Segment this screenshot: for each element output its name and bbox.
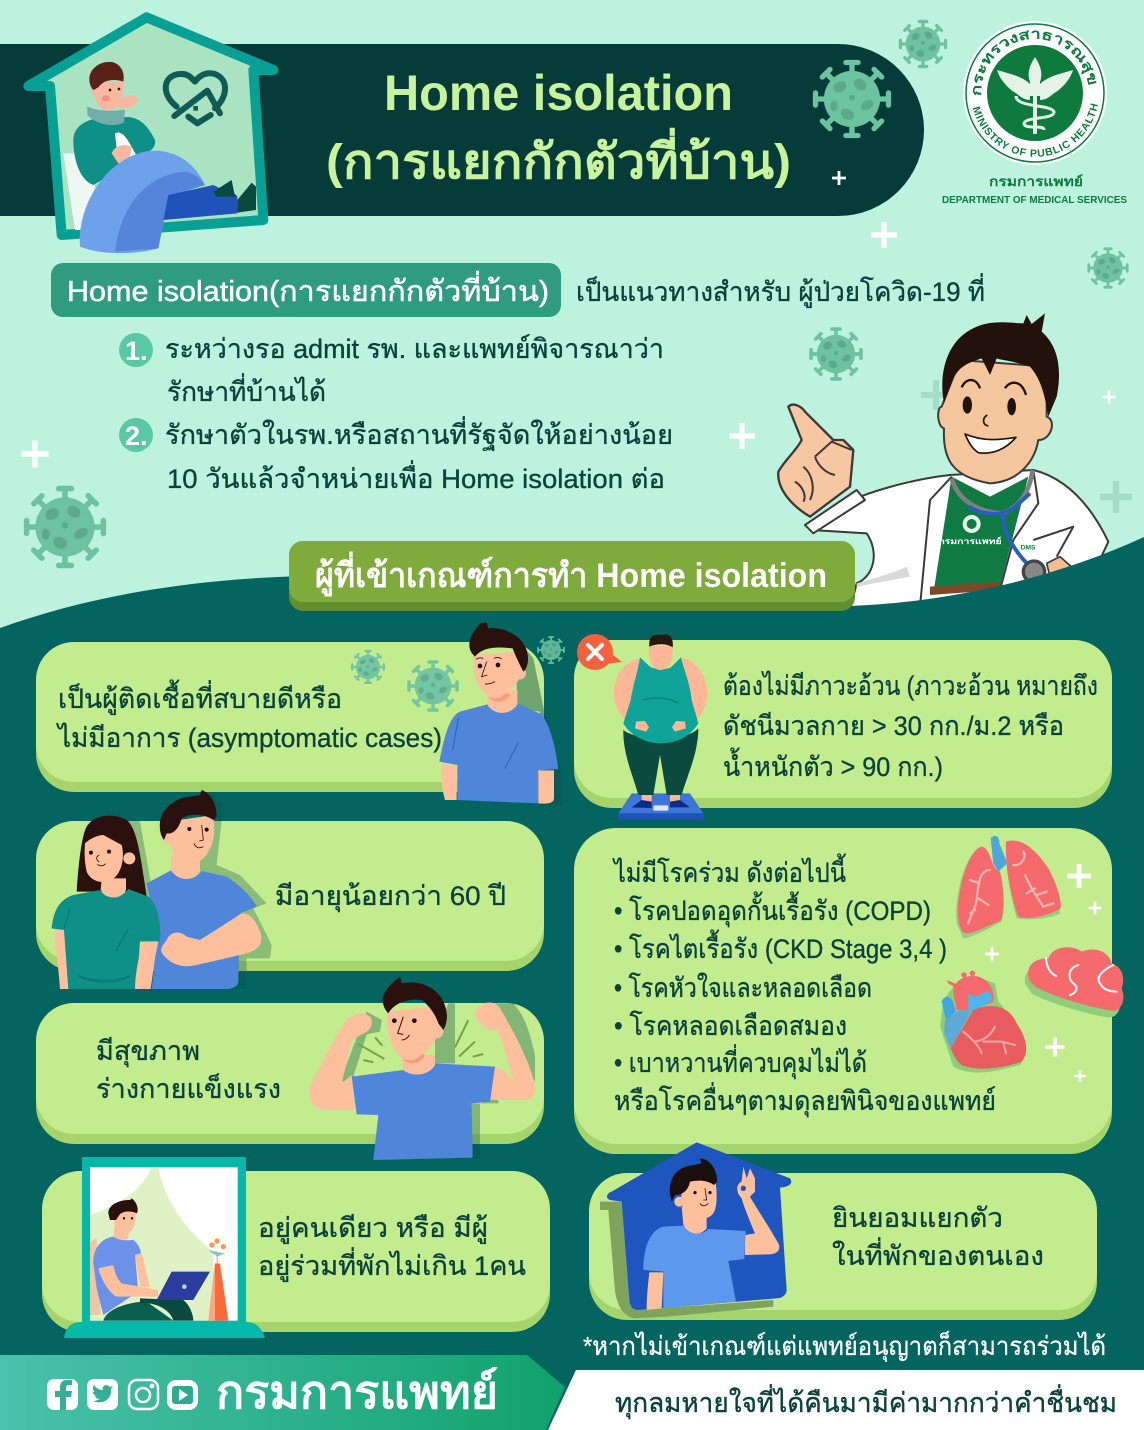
decor: viruses and plus marks: [22, 21, 1132, 565]
title: [326, 65, 791, 189]
criteria heading: ผู้ที่เข้าเกณฑ์การทำ Home isolation: [315, 551, 827, 597]
panel: living alone: อยู่ร่วมที่พักไม่เกิน 1คน: [258, 1247, 526, 1282]
panel: no obesity: น้ำหนักตัว > 90 กก.): [723, 747, 943, 782]
panel: consent to isolate: ยินยอมแยกตัว: [832, 1203, 1003, 1233]
figure: smiling man: [439, 622, 562, 805]
panel: living alone: [42, 1157, 550, 1338]
panel: comorbidities: • โรคไตเรื้อรัง (CKD Stage 3,4 ): [614, 929, 947, 964]
criteria heading: [289, 541, 855, 611]
icon: twitter: [87, 1379, 118, 1410]
figure: man on scale: [614, 634, 707, 820]
icon: house with sick man: [28, 17, 273, 253]
panel: asymptomatic: เป็นผู้ติดเชื้อที่สบายดีหรือ: [58, 679, 342, 715]
icon: heart: [940, 971, 1026, 1073]
note: *หากไม่เข้าเกณฑ์แต่แพทย์อนุญาตก็สามารถร่วมได้: [583, 1330, 1106, 1362]
panel: comorbidities: • โรคหัวใจและหลอดเลือด: [614, 972, 872, 1003]
item 2: รักษาตัวในรพ.หรือสถานที่รัฐจัดให้อย่างน้อย: [165, 416, 673, 451]
item 1: [119, 333, 664, 407]
item 1: รักษาที่บ้านได้: [167, 373, 326, 407]
logo: ministry of public health: [942, 21, 1127, 206]
panel: comorbidities: • โรคปอดอุดกั้นเรื้อรัง (COPD): [614, 891, 931, 928]
panel: comorbidities: • เบาหวานที่ควบคุมไม่ได้: [614, 1044, 867, 1080]
panel: strong health: มีสุขภาพ: [96, 1036, 200, 1068]
panel: comorbidities: [574, 828, 1123, 1154]
title: (การแยกกักตัวที่บ้าน): [326, 127, 791, 189]
doctor character: กรมการแพทย์: [938, 536, 1002, 546]
icon: youtube: [167, 1380, 198, 1410]
item 2: [119, 416, 673, 494]
panel: no obesity: ดัชนีมวลกาย > 30 กก./ม.2 หรือ: [723, 711, 1064, 741]
panel: living alone: อยู่คนเดียว หรือ มีผู้: [258, 1213, 488, 1244]
panel: strong health: [36, 977, 544, 1160]
panel: consent to isolate: [589, 1142, 1097, 1320]
intro pill: Home isolation(การแยกกักตัวที่บ้าน): [67, 271, 549, 308]
panel: comorbidities: หรือโรคอื่นๆตามดุลยพินิจของแพทย์: [614, 1082, 996, 1118]
footer: tagline: ทุกลมหายใจที่ได้คืนมามีค่ามากกว่าคำชื่นชม: [615, 1384, 1117, 1420]
panel: no obesity: [574, 634, 1112, 820]
panel: asymptomatic: [36, 622, 564, 805]
figure: man at window with laptop: [64, 1157, 265, 1338]
title: Home isolation: [384, 65, 733, 121]
icon: lungs: [956, 836, 1061, 938]
doctor character: DMS: [1021, 544, 1036, 551]
item 2: 2.: [125, 421, 148, 451]
footer: department band: กรมการแพทย์: [216, 1366, 498, 1418]
intro sentence: เป็นแนวทางสำหรับ ผู้ป่วยโควิด-19 ที่: [576, 273, 985, 308]
panel: age under 60: [36, 790, 544, 989]
figure: man in blue house: [600, 1142, 791, 1318]
figure: flexing man: [309, 977, 535, 1160]
icon: facebook: [47, 1379, 78, 1410]
figure: woman and man: [52, 790, 272, 989]
panel: strong health: ร่างกายแข็งแรง: [96, 1071, 281, 1104]
teal lower background: [0, 537, 1144, 1430]
icon: instagram: [129, 1380, 158, 1409]
logo: ministry of public health: กระทรวงสาธารณสุข: [973, 30, 1096, 96]
item 2: 10 วันแล้วจำหน่ายเพื่อ Home isolation ต่อ: [167, 460, 665, 494]
icon: brain: [1025, 947, 1123, 1017]
footer: tagline: [548, 1370, 1144, 1430]
header band: [0, 44, 924, 216]
panel: asymptomatic: ไม่มีอาการ (asymptomatic cases): [56, 723, 442, 753]
panel: comorbidities: • โรคหลอดเลือดสมอง: [614, 1011, 847, 1041]
icon: red cross badge: [577, 634, 622, 670]
item 1: ระหว่างรอ admit รพ. และแพทย์พิจารณาว่า: [165, 333, 664, 364]
logo: ministry of public health: MINISTRY OF PUBLIC HEALTH: [972, 103, 1098, 157]
logo: ministry of public health: DEPARTMENT OF MEDICAL SERVICES: [942, 194, 1127, 206]
footer: department band: [0, 1355, 565, 1430]
doctor character: [778, 313, 1108, 610]
item 1: 1.: [125, 336, 148, 366]
panel: comorbidities: ไม่มีโรคร่วม ดังต่อไปนี้: [612, 853, 846, 888]
panel: age under 60: มีอายุน้อยกว่า 60 ปี: [275, 881, 506, 913]
logo: ministry of public health: กรมการแพทย์: [989, 174, 1083, 189]
intro pill: [51, 263, 561, 317]
panel: consent to isolate: ในที่พักของตนเอง: [832, 1237, 1044, 1271]
